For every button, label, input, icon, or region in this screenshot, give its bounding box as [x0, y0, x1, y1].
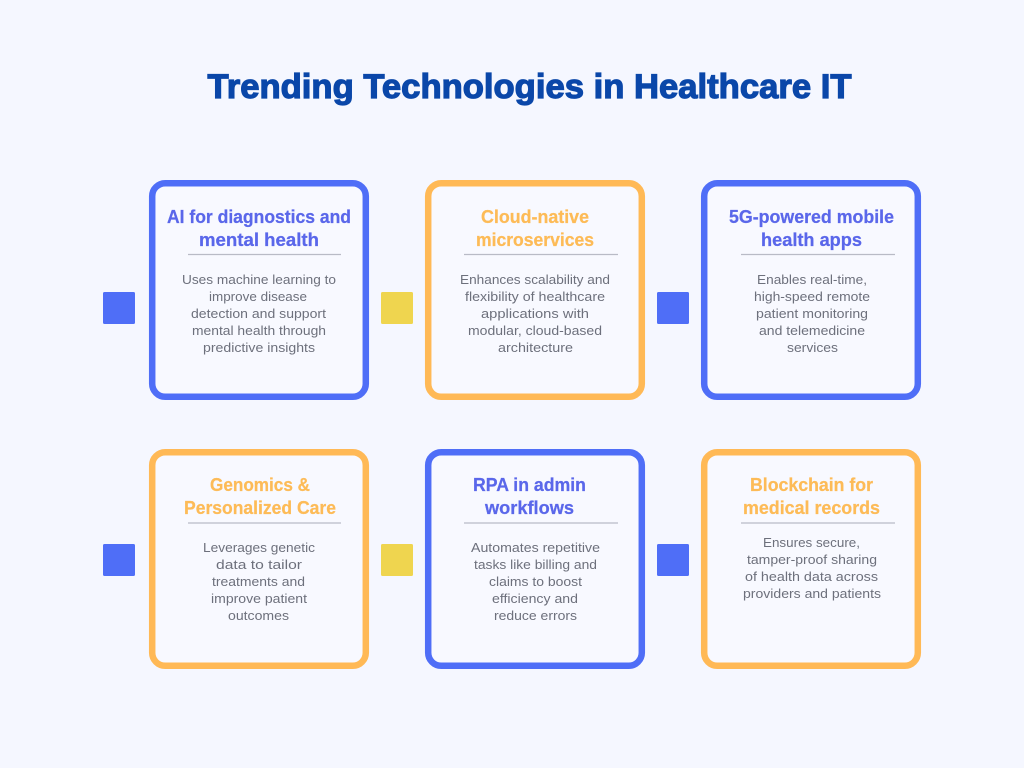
heading: AI for diagnostics	[167, 207, 351, 250]
heading: Blockchain: medical records	[743, 498, 880, 518]
panel: Blockchain for medical records	[704, 452, 918, 666]
text block: blockchain description	[743, 535, 882, 601]
text block: blockchain description: providers and patients	[743, 586, 882, 601]
text block: AI description: detection and support	[191, 306, 326, 321]
icon: yellow square row 1 middle	[381, 292, 413, 324]
text block: AI description: Uses machine learning to	[182, 272, 336, 287]
heading: AI for diagnostics: mental health	[199, 230, 319, 250]
heading: Cloud-native	[476, 207, 594, 250]
text block: genomics description: Leverages genetic	[203, 540, 316, 555]
text block: cloud description: Enhances scalability and	[460, 272, 610, 287]
text block: cloud description	[460, 272, 610, 355]
text block: RPA description: efficiency and	[492, 591, 578, 606]
text block: 5G description: patient monitoring	[756, 306, 868, 321]
text block: genomics description: treatments and	[212, 574, 305, 589]
text block: cloud description: applications with	[481, 306, 589, 321]
heading: 5G-powered	[729, 207, 894, 250]
panel: Genomics and Personalized Care	[152, 452, 366, 666]
text block: 5G description: and telemedicine	[759, 323, 865, 338]
panel: AI for diagnostics and mental health	[152, 183, 366, 397]
text block: RPA description: Automates repetitive	[471, 540, 600, 555]
text block: AI description	[182, 272, 336, 355]
text block: blockchain description: of health data across	[745, 569, 879, 584]
text block: blockchain description: Ensures secure,	[763, 535, 860, 550]
text block: RPA description: reduce errors	[494, 608, 578, 623]
text block: 5G description: services	[787, 340, 839, 355]
text block: genomics description: data to tailor	[216, 557, 303, 572]
icon: blue square row 2 right	[657, 544, 689, 576]
heading: Genomics: Personalized Care	[184, 498, 336, 518]
text block: 5G description	[754, 272, 870, 355]
text block: cloud description: modular, cloud-based	[468, 323, 602, 338]
heading: Blockchain	[743, 475, 880, 518]
icon: blue square row 1 right	[657, 292, 689, 324]
heading: AI for diagnostics: AI for diagnostics and	[167, 207, 351, 227]
text block: AI description: predictive insights	[203, 340, 316, 355]
text block: cloud description: architecture	[498, 340, 573, 355]
heading: Genomics	[184, 475, 336, 518]
panel: RPA in admin workflows	[428, 452, 642, 666]
heading: Cloud-native: Cloud-native	[481, 207, 589, 227]
heading: Blockchain: Blockchain for	[750, 475, 873, 495]
text block: 5G description: high-speed remote	[754, 289, 870, 304]
text block: genomics description	[203, 540, 316, 623]
text block: cloud description: flexibility of healthcare	[465, 289, 605, 304]
heading: Cloud-native: microservices	[476, 230, 594, 250]
text block: RPA description: claims to boost	[489, 574, 582, 589]
panel: 5G-powered mobile health apps	[704, 183, 918, 397]
heading: 5G-powered: health apps	[761, 230, 862, 250]
title: Trending Technologies in Healthcare IT	[208, 68, 852, 106]
icon: yellow square row 2 middle	[381, 544, 413, 576]
heading: RPA: workflows	[484, 498, 574, 518]
icon: blue square row 1 left	[103, 292, 135, 324]
heading: RPA	[473, 475, 586, 518]
text block: blockchain description: tamper-proof sharing	[747, 552, 877, 567]
heading: RPA: RPA in admin	[473, 475, 586, 495]
text block: genomics description: improve patient	[211, 591, 307, 606]
text block: RPA description: tasks like billing and	[474, 557, 597, 572]
text block: RPA description	[471, 540, 600, 623]
icon: blue square row 2 left	[103, 544, 135, 576]
text block: 5G description: Enables real-time,	[757, 272, 867, 287]
text block: genomics description: outcomes	[228, 608, 290, 623]
heading: 5G-powered: 5G-powered mobile	[729, 207, 894, 227]
panel: Cloud-native microservices	[428, 183, 642, 397]
text block: AI description: mental health through	[192, 323, 326, 338]
heading: Genomics: Genomics &	[210, 475, 310, 495]
text block: AI description: improve disease	[209, 289, 307, 304]
